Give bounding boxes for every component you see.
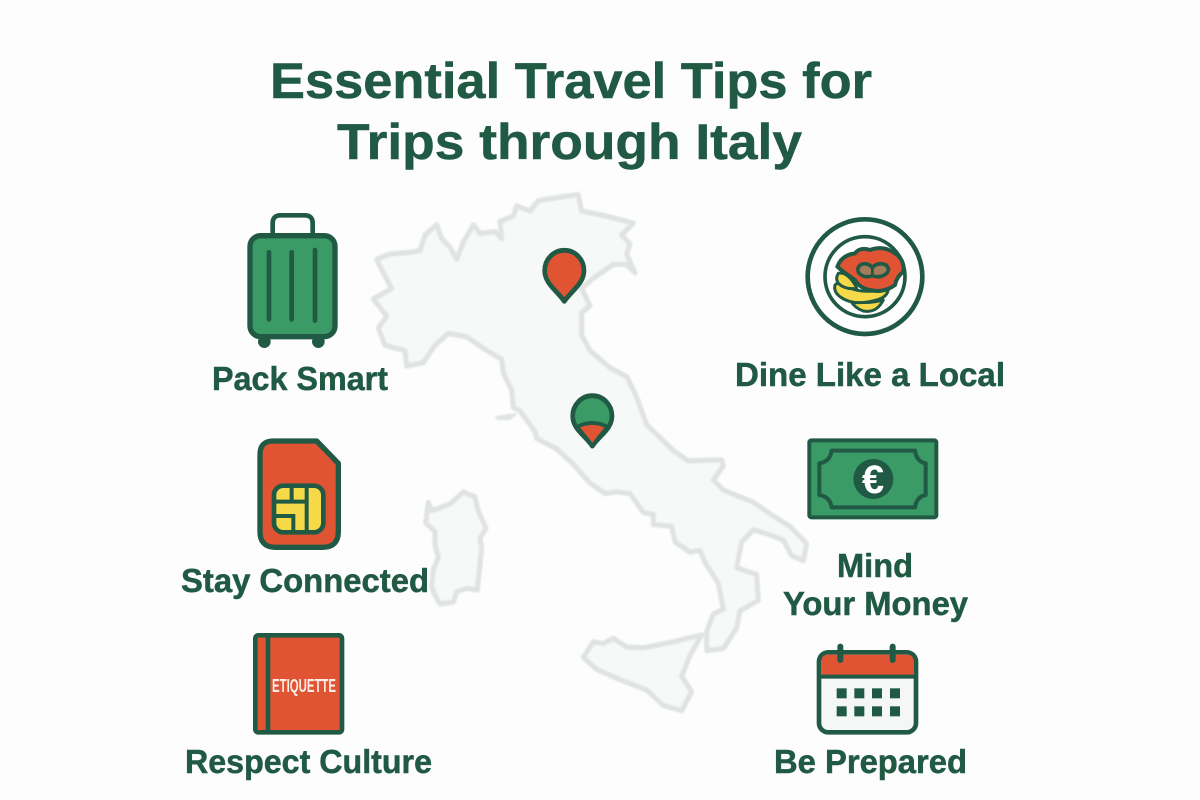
euro symbol: € bbox=[862, 458, 884, 502]
book cover text: ETIQUETTE bbox=[272, 676, 336, 696]
title: Essential Travel Tips for bbox=[270, 53, 872, 109]
map pin: green and red bbox=[573, 396, 612, 446]
icon: plate of pasta bbox=[808, 219, 922, 334]
Sardinia bbox=[426, 492, 486, 604]
mainland bbox=[373, 194, 807, 650]
title: Trips through Italy bbox=[337, 114, 802, 170]
label: Mind Your Money: Your Money bbox=[783, 585, 969, 622]
icon: calendar bbox=[819, 647, 916, 732]
icon: suitcase bbox=[250, 215, 335, 348]
map of Italy bbox=[373, 194, 807, 711]
label: Mind Your Money bbox=[783, 547, 969, 622]
icon: euro banknote bbox=[809, 440, 936, 517]
title bbox=[270, 53, 872, 170]
icon: SIM card bbox=[260, 441, 338, 547]
label: Respect Culture: Respect Culture bbox=[185, 743, 432, 780]
map pin: red bbox=[545, 250, 584, 301]
label: Be Prepared: Be Prepared bbox=[774, 743, 967, 780]
label: Pack Smart: Pack Smart bbox=[212, 360, 388, 397]
label: Dine Like a Local: Dine Like a Local bbox=[735, 356, 1005, 393]
Sicily bbox=[583, 635, 702, 711]
label: Mind Your Money: Mind bbox=[837, 547, 913, 584]
label: Stay Connected: Stay Connected bbox=[181, 562, 429, 599]
icon: etiquette book bbox=[255, 635, 342, 732]
Elba bbox=[496, 414, 516, 419]
